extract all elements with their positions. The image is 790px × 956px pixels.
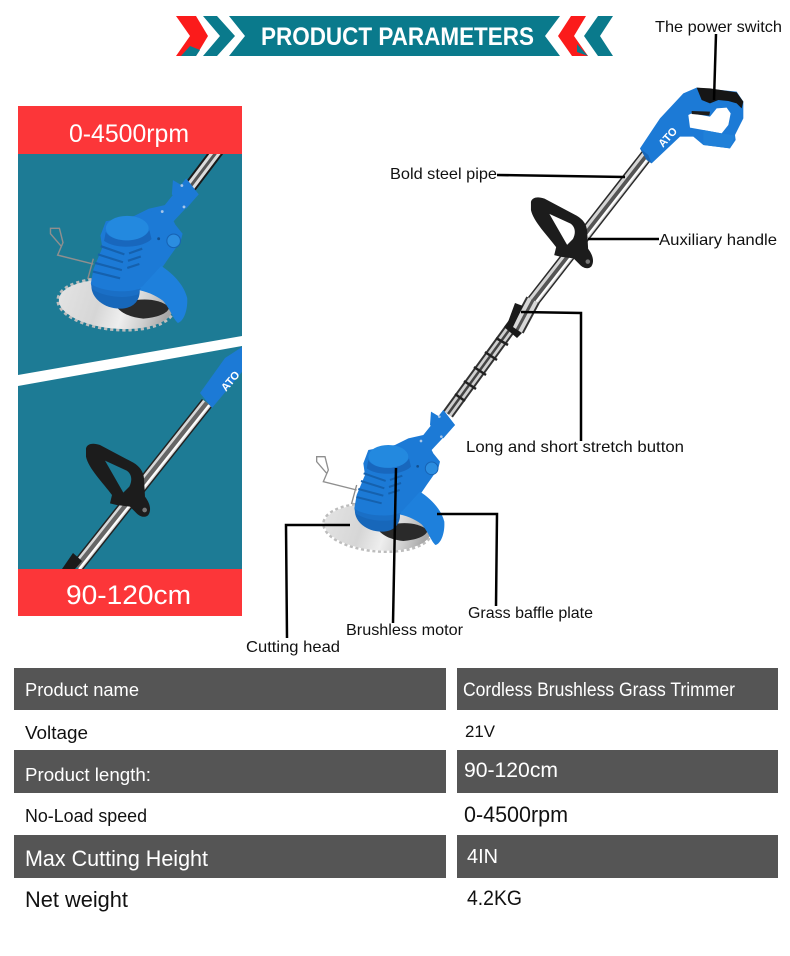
red label: speed: 0-4500rpm [69,120,189,148]
red label: length: 90-120cm [66,580,191,610]
row: product length: Product length: [25,765,151,785]
row: net weight [25,887,522,912]
row: net weight: 4.2KG [467,887,522,910]
callout: stretch button: Long and short stretch button [466,439,684,456]
photo: handle and pipe: ATO [219,369,243,394]
row: product name: Cordless Brushless Grass Trimmer [463,680,736,701]
callout: cutting head: Cutting head [246,639,340,656]
rear power grip [640,88,743,163]
teal photo background [18,154,242,569]
callout: steel pipe: Bold steel pipe [390,166,497,183]
row: product name [14,668,778,710]
row: no-load speed: No-Load speed [25,806,147,826]
photo: cutting head [50,150,218,334]
row: max cutting height: 4IN [467,846,498,868]
callout: baffle plate [437,514,593,622]
lower telescopic pipe [448,322,515,414]
row: max cutting height [14,835,778,878]
banner title: PRODUCT PARAMETERS [261,23,534,51]
row: max cutting height: Max Cutting Height [25,846,208,871]
row: no-load speed: 0-4500rpm [464,802,568,827]
callout: power switch [655,19,782,100]
cutting head [317,410,455,555]
callout: power switch: The power switch [655,19,782,36]
product photo: grass trimmer [317,88,743,555]
photo: handle and pipe [62,347,243,569]
row: product length: 90-120cm [464,759,558,782]
row: no-load speed [25,802,568,827]
ribbon [229,16,560,56]
right chevrons [558,16,613,56]
title banner [176,16,613,56]
callout: motor [346,468,464,639]
stretch coupling [504,300,533,338]
red label: length [18,569,242,616]
callout: stretch button [466,312,684,456]
callout: motor: Brushless motor [346,622,464,639]
left chevrons [176,16,235,56]
row: voltage: Voltage [25,723,88,743]
auxiliary handle [531,197,593,268]
callout: auxiliary handle: Auxiliary handle [659,232,777,249]
callout: baffle plate: Grass baffle plate [468,605,593,622]
panel: feature photos [18,106,243,616]
parameter table [14,668,778,912]
upper steel pipe [530,155,649,307]
row: product name: Product name [25,680,139,700]
row: product length [14,750,778,793]
row: net weight: Net weight [25,887,128,912]
red label: speed [18,106,242,154]
white divider stripe [18,336,242,386]
row: voltage [25,722,496,743]
rear power grip: ATO [656,125,680,150]
callout: cutting head [246,525,350,656]
row: voltage: 21V [465,722,496,741]
